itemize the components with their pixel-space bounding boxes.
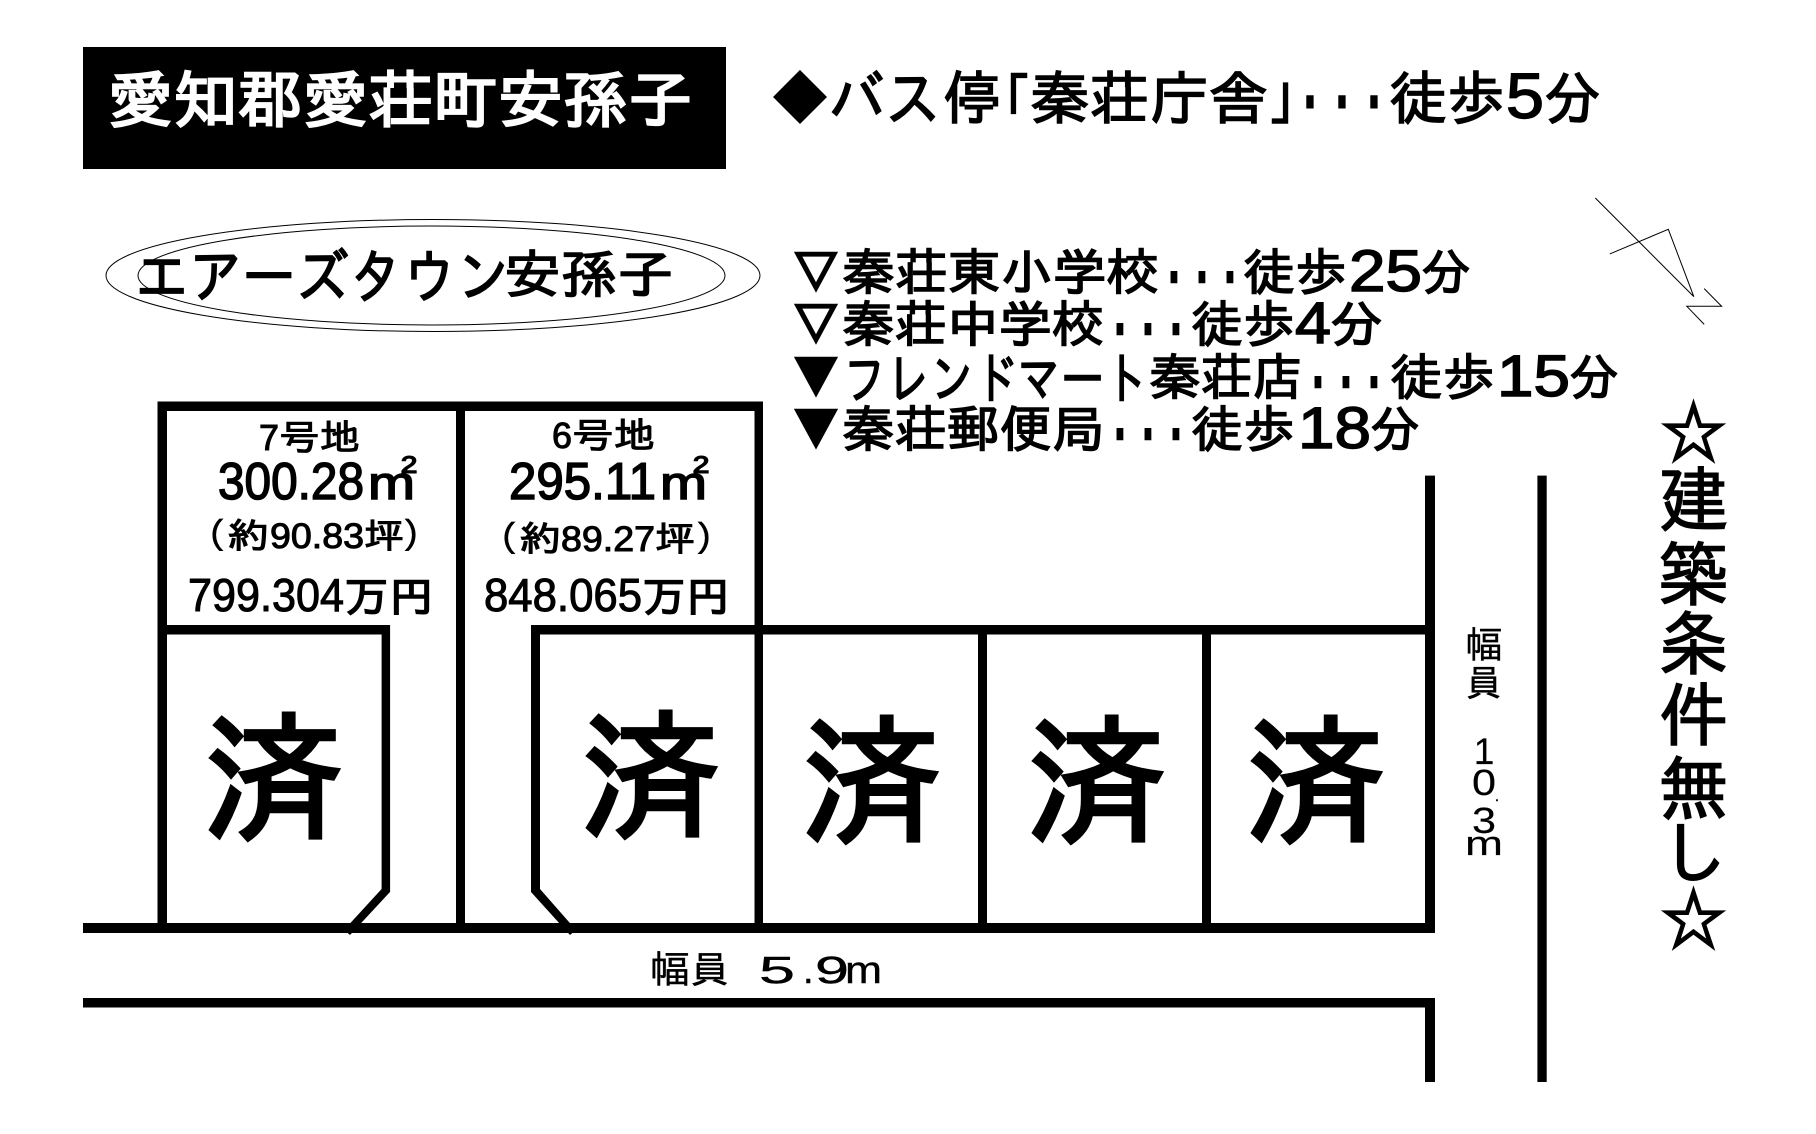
- road width label: 5.9m: m: [845, 950, 882, 992]
- sold marks on lots: [203, 702, 1385, 861]
- facility: supermarket: 分: [1569, 350, 1619, 406]
- lot 6 area in tsubo: 89.27: [561, 520, 655, 559]
- road width label: 5.9m: [650, 950, 882, 992]
- bus stop access text: 分: [1544, 67, 1601, 132]
- facility: post office: [790, 396, 1420, 464]
- sold marks on lots: 済: [1026, 707, 1166, 861]
- facility: junior high school: 4: [1295, 291, 1331, 356]
- road width label: 5.9m: 9: [815, 950, 849, 992]
- north arrow: [1595, 198, 1722, 324]
- vertical note: no building conditions: 建: [1658, 462, 1728, 540]
- facility: supermarket: [790, 344, 1619, 412]
- facility: junior high school: ▽: [790, 299, 842, 349]
- bus stop access text: ・・・: [1294, 72, 1390, 137]
- sold marks on lots: 済: [203, 704, 343, 858]
- road width label: 10.3m vertical: 員: [1466, 663, 1502, 704]
- lot 7 area: 300.28: [218, 453, 364, 511]
- road width label: 10.3m vertical: 0: [1472, 762, 1496, 803]
- facility: supermarket: ▼: [790, 352, 842, 402]
- lot 6 number: 号地: [572, 415, 655, 456]
- lot 6 area in tsubo: 約: [519, 520, 561, 559]
- road width label: 5.9m: 5: [759, 950, 795, 992]
- road width label: 5.9m: 幅員: [650, 950, 730, 992]
- facility: elementary school: 分: [1421, 245, 1471, 301]
- subdivision name in double ellipse: 安孫子: [504, 247, 674, 305]
- sold marks on lots: 済: [1245, 707, 1385, 861]
- lot 7 price: 万円: [344, 574, 434, 621]
- facility: elementary school: 徒歩: [1243, 245, 1347, 301]
- vertical note: no building conditions: 件: [1658, 677, 1728, 755]
- vertical note: no building conditions: 無: [1658, 751, 1728, 829]
- lot 6 price: 万円: [642, 574, 730, 621]
- lot 6 area in tsubo: [482, 520, 731, 559]
- facility: supermarket: 秦荘店: [1149, 350, 1304, 406]
- facility: elementary school: [790, 239, 1471, 307]
- road width label: 10.3m vertical: m: [1465, 825, 1503, 863]
- facility: post office: 18: [1298, 396, 1371, 461]
- lot 7 number: 7: [259, 417, 279, 458]
- facility: elementary school: 秦荘東小学校: [842, 245, 1159, 301]
- facility: elementary school: ・・・: [1160, 251, 1244, 307]
- lot 7 price: [188, 569, 434, 621]
- bus stop access text: バス: [829, 66, 941, 135]
- road width label: 10.3m vertical: 幅: [1466, 625, 1502, 666]
- lot 7 area: ²: [401, 449, 417, 493]
- facility: elementary school: ▽: [790, 247, 842, 297]
- bus stop access text: 秦荘庁舎: [1030, 67, 1268, 132]
- lot 6 price: 848.065: [484, 569, 642, 621]
- facility: post office: 徒歩: [1191, 402, 1295, 458]
- bus stop access text: 停: [943, 67, 1001, 132]
- facility: supermarket: 徒歩: [1390, 350, 1495, 406]
- title banner: 愛知郡愛荘町安孫子: [108, 67, 693, 136]
- lot 6 area in tsubo: 坪: [655, 520, 695, 559]
- lot 7 area in tsubo: ）: [403, 517, 438, 556]
- bus stop access text: 」: [1268, 69, 1323, 131]
- facility: junior high school: 分: [1330, 297, 1383, 353]
- lot 6 number: 6: [552, 415, 572, 456]
- road width label: 10.3m vertical: 3: [1472, 800, 1496, 841]
- bus stop access text: 徒歩: [1389, 67, 1505, 132]
- lot 7 price: 799.304: [188, 569, 344, 621]
- lot 7 area in tsubo: [190, 517, 438, 556]
- lot 7 area in tsubo: 坪: [364, 517, 404, 556]
- facility: post office: 分: [1370, 402, 1420, 458]
- vertical note: no building conditions: ☆: [1658, 884, 1728, 954]
- vertical note: no building conditions: [1658, 397, 1728, 954]
- nearby facilities list: [790, 239, 1619, 464]
- facility: supermarket: フレンドマート: [843, 348, 1148, 411]
- lot 6 price: [484, 569, 730, 621]
- lot 6 area: 295.11: [509, 453, 656, 511]
- subdivision name in double ellipse: [106, 220, 760, 332]
- vertical note: no building conditions: ☆: [1658, 397, 1728, 467]
- lot 7 number: 号地: [279, 417, 360, 458]
- facility: post office: ・・・: [1106, 408, 1190, 464]
- bus stop access text: 「: [976, 69, 1031, 131]
- lot 7 area in tsubo: 約: [227, 517, 269, 556]
- lot 7 area in tsubo: （: [190, 517, 225, 556]
- sold marks on lots: 済: [580, 702, 720, 856]
- vertical note: no building conditions: し: [1658, 815, 1728, 893]
- facility: junior high school: 徒歩: [1191, 297, 1295, 353]
- bus stop access text: [771, 60, 1601, 137]
- facility: elementary school: 25: [1349, 239, 1422, 304]
- road width label: 10.3m vertical: [1465, 625, 1503, 863]
- lot 6 number: [552, 415, 655, 456]
- lot 6 area: ²: [693, 449, 709, 493]
- subdivision name in double ellipse: エアーズタウン: [135, 244, 510, 311]
- lot 7 details: [188, 417, 438, 621]
- lot 6 details: [482, 415, 731, 621]
- facility: post office: 秦荘郵便局: [842, 402, 1104, 458]
- lot 7 area: m: [368, 457, 415, 509]
- lot 6 area: m: [660, 457, 707, 509]
- lot 6 area in tsubo: （: [482, 520, 517, 559]
- facility: post office: ▼: [790, 404, 842, 454]
- site plan boundary lines: [83, 402, 1547, 1082]
- vertical note: no building conditions: 条: [1658, 606, 1728, 684]
- facility: supermarket: ・・・: [1304, 356, 1388, 412]
- facility: supermarket: 15: [1497, 344, 1570, 409]
- bus stop access text: 5: [1506, 60, 1544, 132]
- lot 6 area in tsubo: ）: [696, 520, 731, 559]
- lot 7 area in tsubo: 90.83: [270, 517, 364, 556]
- facility: junior high school: 秦荘中学校: [842, 297, 1104, 353]
- bus stop access text: ◆: [771, 68, 829, 126]
- sold marks on lots: 済: [801, 707, 941, 861]
- road width label: 10.3m vertical: .: [1495, 788, 1499, 804]
- road width label: 10.3m vertical: 1: [1474, 731, 1494, 772]
- facility: junior high school: ・・・: [1106, 303, 1190, 359]
- road width label: 5.9m: .: [803, 950, 814, 992]
- title banner: [83, 47, 726, 169]
- facility: junior high school: [790, 291, 1383, 359]
- vertical note: no building conditions: 築: [1658, 537, 1728, 615]
